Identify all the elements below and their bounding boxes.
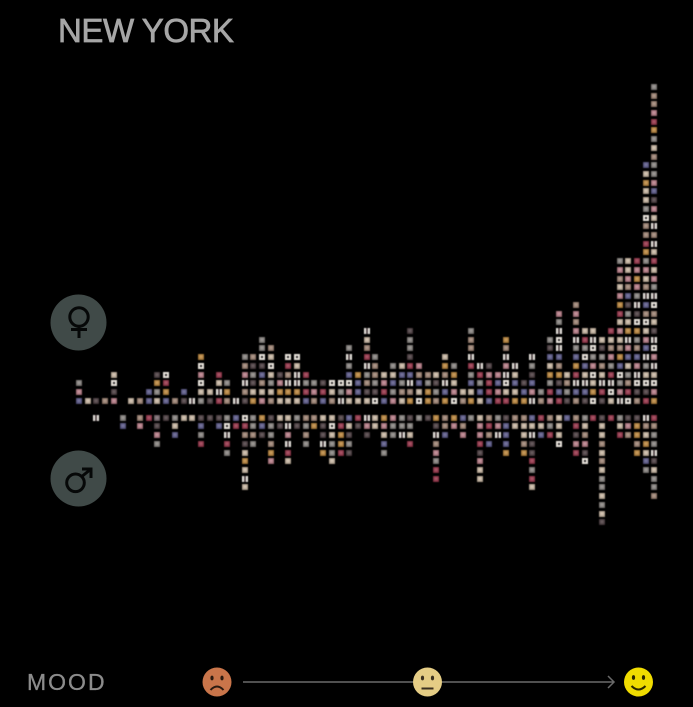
title: NEW YORK — [58, 12, 233, 49]
icon: happy face — [624, 668, 653, 696]
icon: female symbol — [50, 294, 106, 350]
icon: neutral face — [413, 668, 442, 696]
mood scale — [202, 668, 653, 696]
label: mood: MOOD — [27, 669, 107, 695]
panel: men's photos — [92, 414, 658, 526]
panel: women's photos — [75, 83, 658, 405]
arrow: mood axis — [243, 676, 614, 688]
icon: sad face — [202, 668, 232, 696]
icon: male symbol — [50, 450, 106, 506]
chart: photo grid by mood and gender — [75, 83, 658, 526]
